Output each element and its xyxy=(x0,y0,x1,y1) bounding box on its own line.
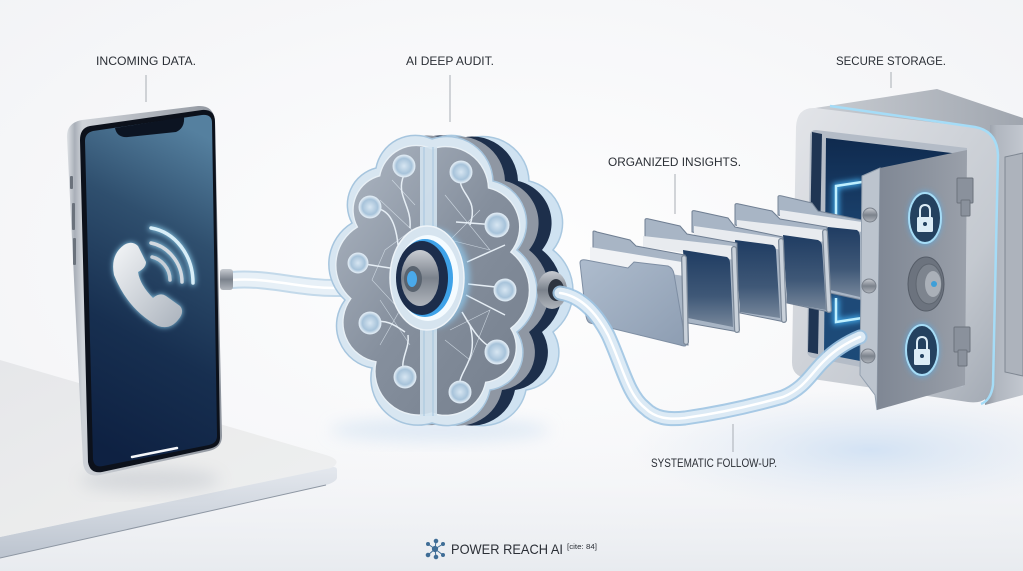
brand name: POWER REACH AI xyxy=(451,541,563,557)
logo icon xyxy=(426,539,444,559)
brain central hub xyxy=(390,226,470,330)
desk surface xyxy=(0,360,337,558)
safe side face xyxy=(985,125,1023,405)
combination dial xyxy=(908,257,944,311)
safe cavity xyxy=(807,130,967,387)
phone notch xyxy=(115,117,184,137)
safe neon edge xyxy=(830,106,998,404)
phone side buttons xyxy=(70,176,76,265)
door face xyxy=(877,150,967,410)
label: secure storage xyxy=(836,54,946,88)
label: systematic follow-up: SYSTEMATIC FOLLOW-UP. xyxy=(651,456,777,470)
connector tube: AI core to safe xyxy=(560,293,860,419)
brain front face xyxy=(329,135,537,426)
label: systematic follow-up xyxy=(651,424,777,470)
brain circuit traces xyxy=(358,172,505,392)
AI core brain xyxy=(329,135,573,426)
label: AI deep audit: AI DEEP AUDIT. xyxy=(406,54,494,68)
label: organized insights xyxy=(608,155,741,214)
citation mark: [cite: 84] xyxy=(567,544,597,551)
folder 3 xyxy=(692,211,785,322)
brain network lines xyxy=(372,180,490,360)
phone screen xyxy=(85,115,217,466)
phone body xyxy=(67,106,222,476)
label: AI deep audit xyxy=(406,54,494,122)
label: secure storage: SECURE STORAGE. xyxy=(836,54,946,68)
safe front frame xyxy=(792,108,998,402)
connector tube: phone to AI core xyxy=(232,278,412,288)
phone xyxy=(67,106,222,476)
label: incoming data: INCOMING DATA. xyxy=(96,54,196,68)
safe top face xyxy=(815,89,1023,137)
phone call icon xyxy=(113,228,193,327)
folder 5 xyxy=(778,196,862,300)
footer logo xyxy=(426,539,597,559)
safe side panel xyxy=(1005,153,1023,376)
folders xyxy=(580,196,862,346)
door hinges xyxy=(954,178,973,366)
folder 1 xyxy=(580,231,688,346)
label: organized insights: ORGANIZED INSIGHTS. xyxy=(608,155,741,169)
phone tube connector xyxy=(220,269,233,290)
label: incoming data xyxy=(96,54,196,102)
safe door xyxy=(860,150,973,410)
safe xyxy=(792,89,1023,405)
door edge xyxy=(860,168,880,410)
upper lock icon xyxy=(908,191,942,245)
door bolts xyxy=(861,208,877,363)
phone bezel xyxy=(80,110,220,472)
phone home bar xyxy=(132,448,177,457)
brain outlet connector xyxy=(537,271,567,309)
brain nodes xyxy=(348,155,516,403)
folder 2 xyxy=(643,219,739,332)
lower lock icon xyxy=(905,323,939,377)
brain back layers xyxy=(341,135,573,426)
safe interior light frame xyxy=(836,182,862,322)
folder 4 xyxy=(735,204,829,312)
